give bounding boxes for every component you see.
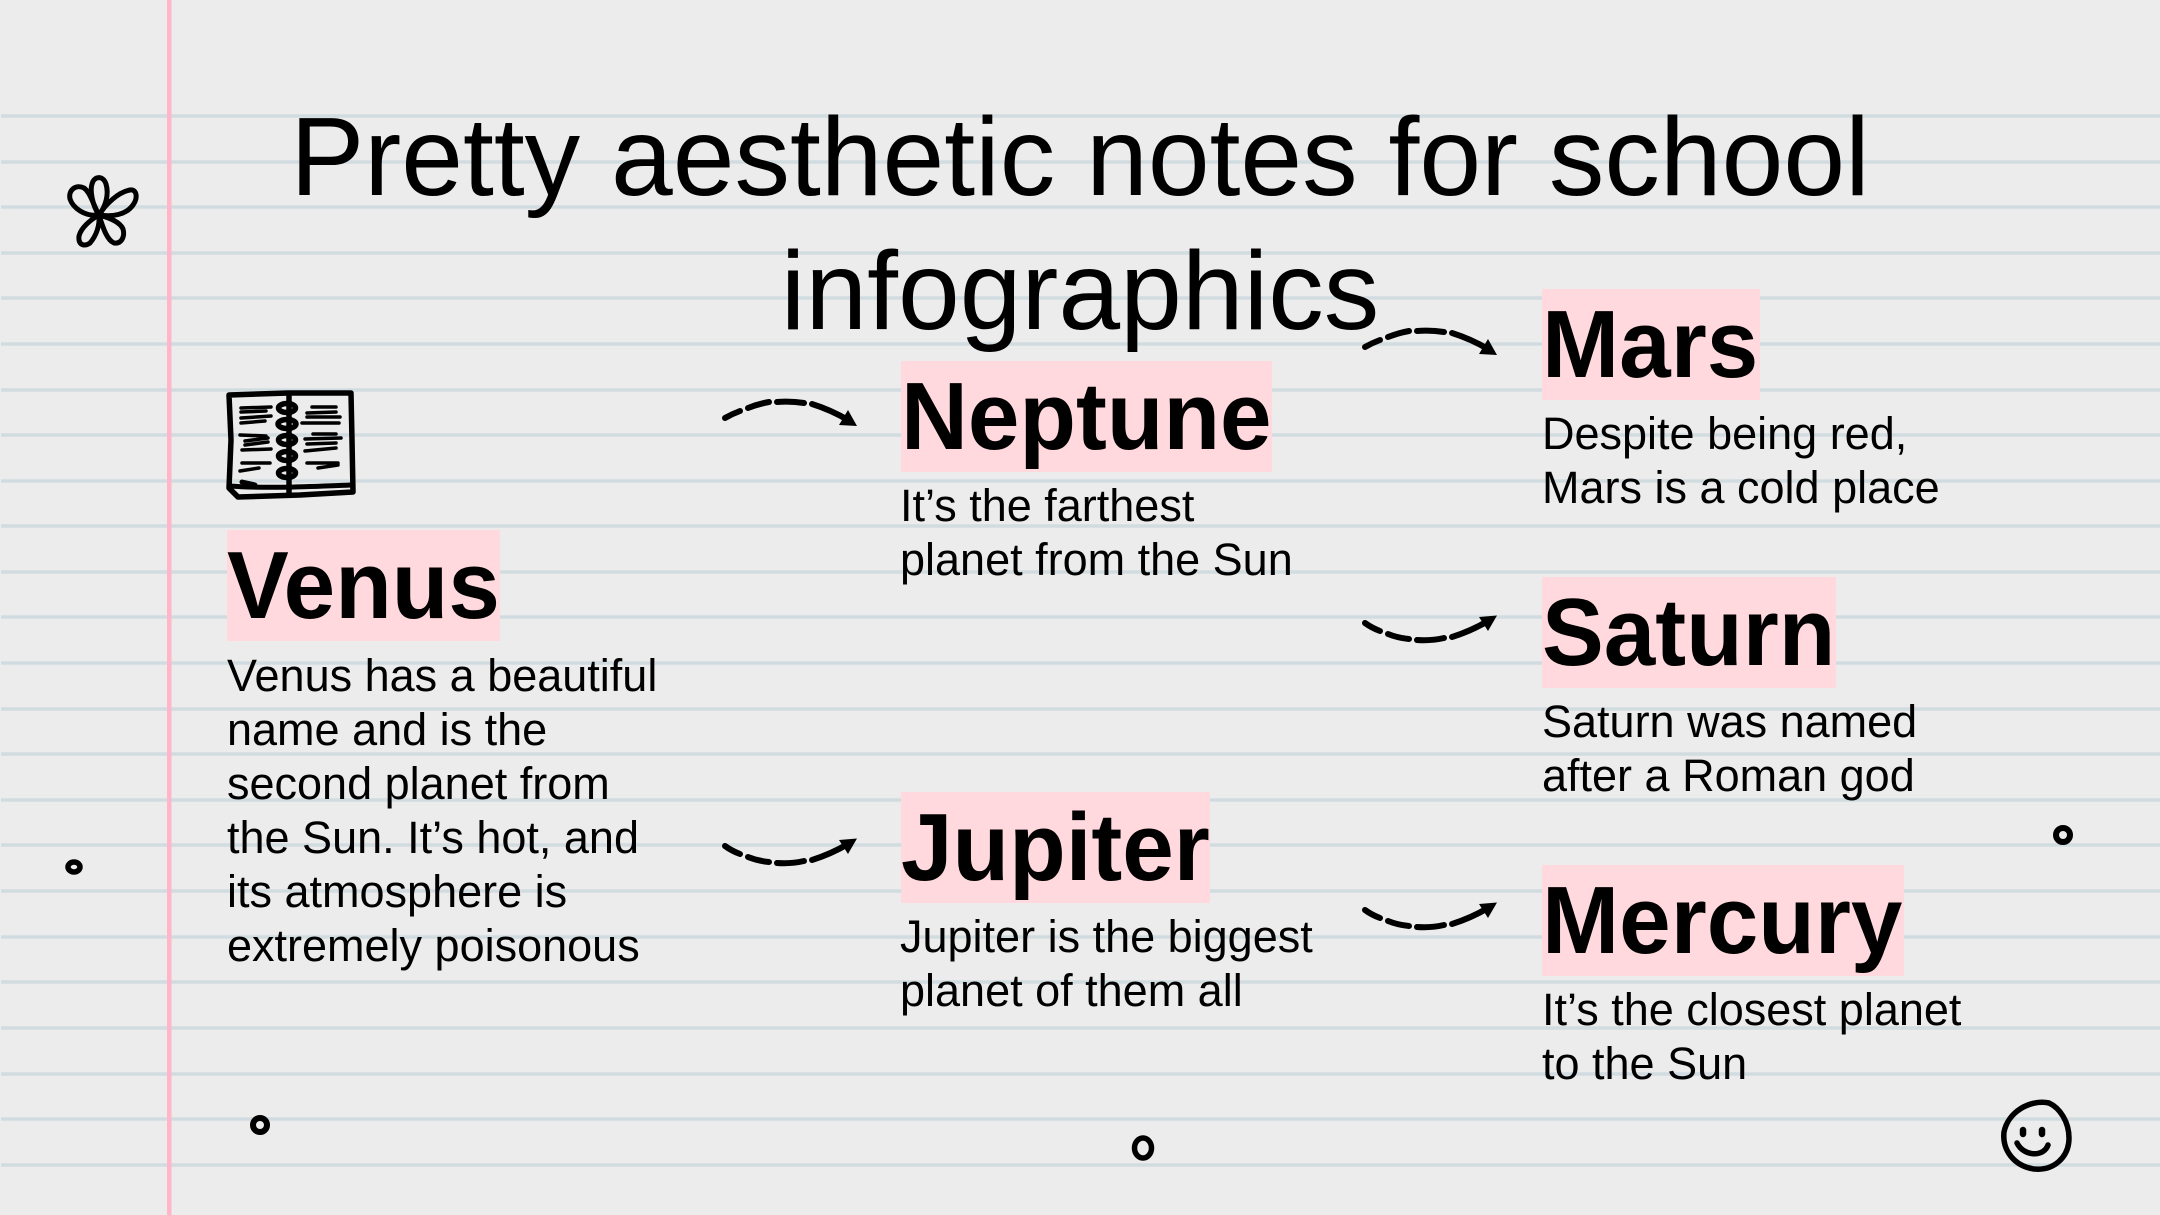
heading: Venus: Venus (226, 532, 499, 638)
text: Venus description: its atmosphere is (227, 866, 567, 916)
icon: smiley face (2001, 1100, 2072, 1172)
text: Neptune description: It’s the farthest (900, 480, 1194, 531)
text: Mercury description: It’s the closest planet (1542, 984, 1961, 1035)
text: Saturn description: after a Roman god (1542, 750, 1915, 801)
title: infographics (781, 229, 1379, 353)
doodle: small circle right (2053, 825, 2073, 845)
heading: Mercury: Mercury (1542, 867, 1902, 974)
title: Pretty aesthetic notes for school (290, 95, 1870, 219)
arrow: Venus to Neptune (722, 398, 857, 426)
text: Venus description: Venus has a beautiful (227, 650, 657, 700)
text: Neptune description (900, 480, 1293, 585)
text: Neptune description: planet from the Sun (900, 534, 1293, 585)
heading: Saturn: Saturn (1542, 579, 1835, 686)
text: Mercury description (1542, 984, 1962, 1089)
text: Venus description (227, 650, 657, 970)
doodle: small circle bottom left (250, 1115, 270, 1135)
arrow: to Mercury (1362, 902, 1497, 930)
title (290, 95, 1870, 353)
text: Venus description: the Sun. It’s hot, and (227, 812, 639, 862)
text: Jupiter description (900, 911, 1313, 1016)
text: Venus description: extremely poisonous (227, 920, 640, 970)
text: Jupiter description: planet of them all (900, 965, 1243, 1016)
icon: open notebook (226, 390, 356, 500)
text: Jupiter description: Jupiter is the biggest (900, 911, 1313, 962)
arrow: to Mars (1362, 328, 1497, 355)
icon: flower doodle (67, 175, 139, 248)
text: Saturn description (1542, 696, 1917, 801)
text: Mars description: Despite being red, (1542, 408, 1907, 459)
doodle: small circle bottom center (1132, 1135, 1154, 1161)
heading: Neptune: Neptune (901, 363, 1272, 470)
text: Venus description: name and is the (227, 704, 547, 754)
text: Saturn description: Saturn was named (1542, 696, 1917, 747)
doodle: small circle left (65, 859, 83, 875)
text: Venus description: second planet from (227, 758, 610, 808)
text: Mars description (1542, 408, 1940, 513)
arrow: to Saturn (1362, 616, 1497, 644)
text: Mars description: Mars is a cold place (1542, 462, 1940, 513)
heading: Jupiter: Jupiter (901, 794, 1210, 901)
heading: Mars: Mars (1542, 291, 1758, 398)
text: Mercury description: to the Sun (1542, 1038, 1747, 1089)
arrow: Venus to Jupiter (722, 838, 857, 866)
